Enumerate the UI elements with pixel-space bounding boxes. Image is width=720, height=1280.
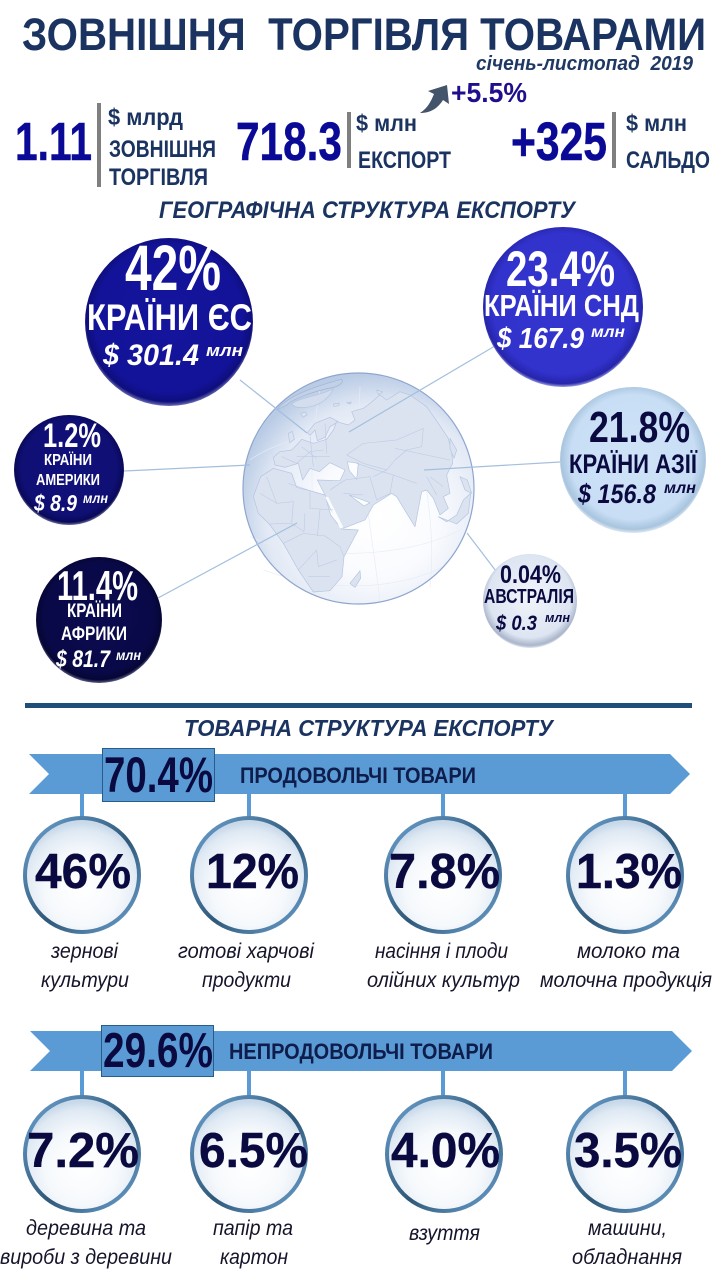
item: machinery [568, 1097, 682, 1269]
item: prepared food: продукти [202, 969, 291, 992]
ribbon arrow [29, 754, 690, 794]
bubble: CIS [483, 227, 643, 387]
bubble: America: $ 8.9 [33, 490, 77, 516]
bubble: EU: КРАЇНИ ЄС [87, 297, 252, 338]
connector lines [124, 343, 560, 598]
bubble: EU: млн [206, 341, 243, 360]
item: footwear: 4.0% [391, 1124, 500, 1178]
stat: balance: +325 [511, 112, 607, 172]
bubble: Asia [560, 387, 706, 533]
bubble: America: КРАЇНИ [44, 451, 92, 469]
globe [243, 373, 474, 604]
heading: geographic structure: ГЕОГРАФІЧНА СТРУКТУРА ЕКСПОРТУ [159, 197, 577, 224]
bubble: Asia: $ 156.8 [577, 479, 656, 509]
item: wood: 7.2% [27, 1124, 139, 1178]
stems [80, 794, 627, 818]
ribbon label: НЕПРОДОВОЛЬЧІ ТОВАРИ [229, 1039, 493, 1064]
stat: foreign trade: ТОРГІВЛЯ [109, 164, 208, 191]
bubble: CIS: 23.4% [506, 241, 615, 297]
bubble: Asia: млн [664, 480, 696, 497]
stat: foreign trade [15, 103, 216, 191]
bubble: Australia [483, 554, 577, 648]
stat: balance: $ млн [626, 110, 687, 136]
bubble: Africa: 11.4% [57, 562, 138, 609]
bubble: Australia: млн [545, 610, 570, 625]
subtitle: period: січень-листопад 2019 [476, 53, 694, 75]
section: food goods [25, 747, 712, 992]
share box: 29.6% [103, 1024, 213, 1078]
stat: export: 718.3 [236, 112, 342, 172]
item: prepared food [178, 818, 315, 992]
item: paper [192, 1097, 308, 1269]
item: wood: вироби з деревини [0, 1246, 172, 1269]
export growth: +5.5% [451, 77, 527, 108]
item: oil seeds: олійних культур [367, 969, 520, 992]
item: paper: папір та [213, 1217, 293, 1240]
item: wood [0, 1097, 172, 1269]
ribbon label: ПРОДОВОЛЬЧІ ТОВАРИ [240, 763, 476, 788]
share box: 70.4% [104, 747, 213, 803]
heading: commodity structure: ТОВАРНА СТРУКТУРА ЕКСПОРТУ [184, 715, 555, 741]
bubble: America: млн [83, 490, 108, 506]
item: machinery: 3.5% [574, 1124, 682, 1178]
stems [80, 1071, 627, 1096]
item: prepared food: готові харчові [178, 940, 315, 963]
item: footwear [387, 1097, 501, 1245]
bubble: Africa: $ 81.7 [55, 646, 111, 673]
bubble: America [14, 415, 124, 525]
stat: balance [511, 110, 710, 174]
bubble: Australia: $ 0.3 [495, 612, 537, 635]
item: oil seeds: 7.8% [389, 845, 500, 899]
stat: export [236, 110, 451, 174]
section: non-food goods [0, 1024, 692, 1269]
item: grain: 46% [35, 845, 131, 899]
stat: foreign trade: ЗОВНІШНЯ [109, 136, 216, 163]
bubble: EU: $ 301.4 [102, 339, 199, 372]
stat: export: $ млн [356, 110, 417, 136]
bubble: EU [85, 232, 253, 406]
bubble: CIS: КРАЇНИ СНД [484, 288, 639, 323]
bubble: Australia: АВСТРАЛІЯ [484, 586, 574, 608]
bubble: Africa [36, 557, 162, 683]
item: grain: зернові [50, 940, 119, 963]
item: dairy: 1.3% [576, 845, 682, 899]
item: oil seeds [367, 818, 520, 992]
ribbon arrow [30, 1031, 692, 1071]
item: grain [25, 818, 139, 992]
bubble: Africa: АФРИКИ [61, 624, 127, 645]
stat: export: ЕКСПОРТ [358, 147, 451, 174]
stat: foreign trade: $ млрд [108, 104, 183, 130]
bubble: CIS: млн [591, 324, 625, 341]
icon: growth arrow [420, 85, 449, 113]
bubble: Africa: КРАЇНИ [67, 601, 122, 622]
bubble: EU: 42% [125, 232, 221, 304]
item: paper: 6.5% [199, 1124, 308, 1178]
item: machinery: обладнання [572, 1246, 682, 1269]
stat: foreign trade: 1.11 [15, 112, 92, 172]
item: footwear: взуття [409, 1222, 480, 1245]
item: paper: картон [220, 1246, 288, 1269]
bubble: CIS: $ 167.9 [496, 323, 584, 355]
bubble: Australia: 0.04% [500, 561, 561, 589]
item: dairy [540, 818, 712, 992]
bubble: Africa: млн [116, 647, 141, 663]
bubble: America: 1.2% [43, 417, 101, 455]
item: prepared food: 12% [206, 845, 299, 899]
item: grain: культури [41, 969, 129, 992]
item: oil seeds: насіння і плоди [375, 940, 508, 963]
item: machinery: машини, [588, 1217, 667, 1240]
item: wood: деревина та [26, 1217, 146, 1240]
bubble: Asia: 21.8% [589, 403, 690, 452]
bubble: America: АМЕРИКИ [36, 472, 100, 489]
item: dairy: молочна продукція [540, 969, 712, 992]
item: dairy: молоко та [577, 940, 680, 963]
